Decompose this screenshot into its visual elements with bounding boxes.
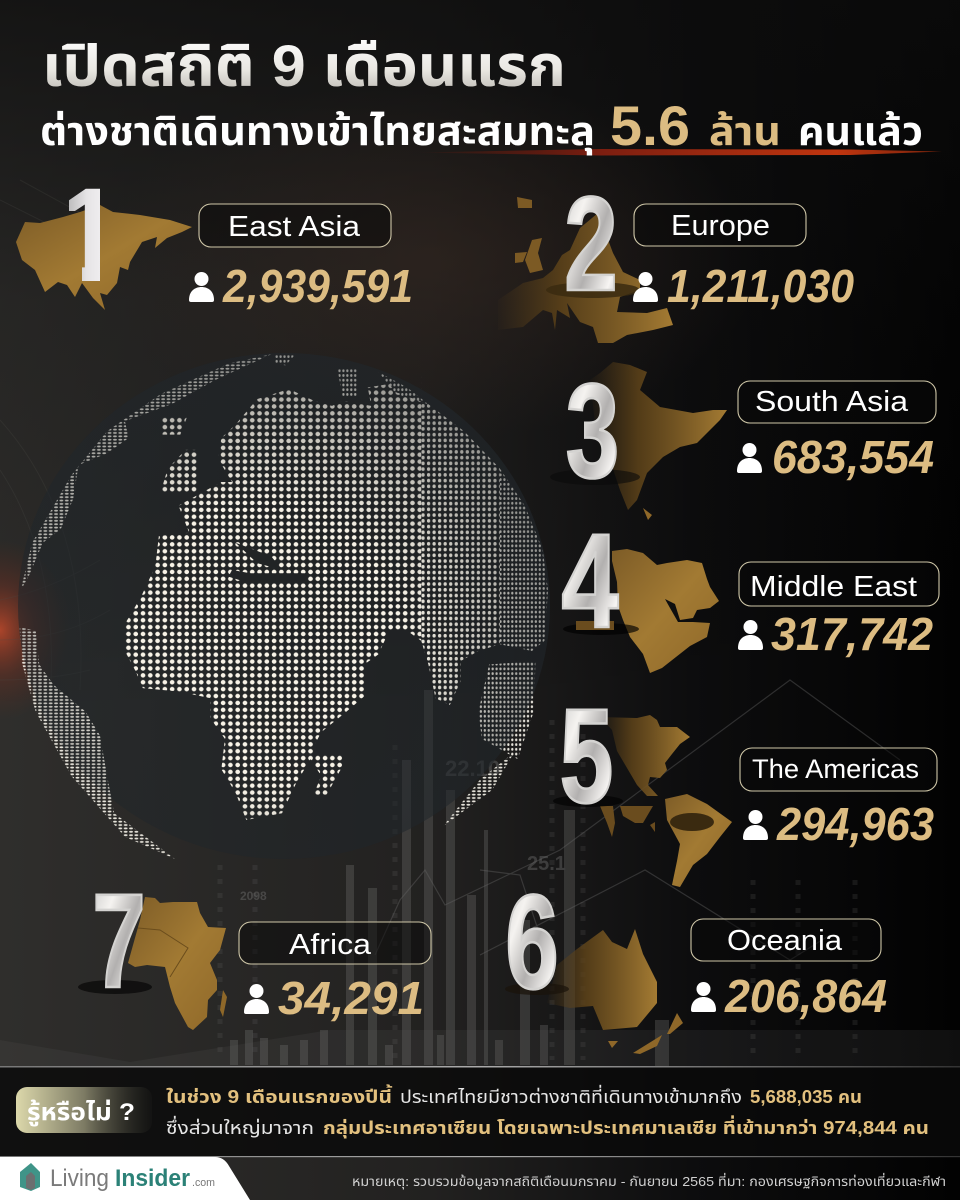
did you know text: 5,688,035 คน — [750, 1087, 862, 1107]
panel: The Americas: 294,963 — [776, 798, 934, 850]
logo panel: Insider — [115, 1165, 190, 1192]
panel: The Americas: 5 — [560, 680, 613, 831]
panel: East Asia: East Asia — [228, 211, 361, 243]
red underline — [415, 149, 942, 156]
did you know badge — [16, 1087, 152, 1133]
logo icon — [20, 1163, 40, 1191]
faint candlestick chart: 22.10 — [445, 756, 500, 781]
title: ล้าน — [709, 109, 781, 154]
title: ต่างชาติเดินทางเข้าไทยสะสมทะลุ — [40, 109, 595, 156]
faint candlestick chart: 2098 — [240, 889, 267, 903]
panel: Africa: Africa — [289, 929, 372, 961]
title — [40, 34, 942, 157]
logo panel: Living — [50, 1165, 109, 1192]
faint candlestick chart — [230, 690, 669, 1067]
did you know band — [0, 1066, 960, 1157]
logo panel: .com — [192, 1177, 215, 1189]
panel: Europe: 2 — [564, 168, 618, 319]
panel: South Asia: 683,554 — [772, 431, 934, 483]
did you know text: ซึ่งส่วนใหญ่มาจาก — [166, 1115, 314, 1138]
panel: Africa: 34,291 — [278, 972, 424, 1024]
panel: Middle East: 317,742 — [771, 608, 933, 660]
limb crescent bottom-right — [443, 752, 514, 827]
logo panel — [0, 1157, 250, 1200]
Iceland and UK dots — [161, 416, 198, 492]
panel: Africa: 7 — [92, 865, 146, 1016]
globe — [18, 353, 550, 859]
faint candlestick chart: 25.1 — [527, 853, 566, 875]
did you know text: ในช่วง 9 เดือนแรกของปีนี้ — [166, 1084, 393, 1107]
panel: East Asia — [16, 188, 411, 310]
footnote: หมายเหตุ: รวบรวมข้อมูลจากสถิติเดือนมกราคม - กันยายน 2565 ที่มา: กองเศรษฐกิจการท่องเที่ยวและกีฬา — [352, 1172, 946, 1189]
panel: Africa — [78, 865, 431, 1030]
limb crescent top-left — [21, 354, 271, 590]
title: 5.6 — [610, 94, 690, 157]
panel: Middle East: Middle East — [750, 571, 917, 603]
panel: Europe — [498, 168, 854, 343]
did you know text — [166, 1084, 929, 1139]
panel: South Asia: South Asia — [755, 386, 909, 418]
did you know text: ประเทศไทยมีชาวต่างชาติที่เดินทางเข้ามากถึง — [400, 1084, 742, 1107]
panel: South Asia — [550, 355, 936, 520]
panel: Europe: Europe — [671, 210, 770, 242]
panel: Middle East: 4 — [561, 507, 619, 656]
title: เปิดสถิติ 9 เดือนแรก — [42, 34, 566, 99]
title: คนแล้ว — [798, 109, 923, 154]
panel: Middle East — [561, 507, 939, 673]
panel: Europe: 1,211,030 — [667, 260, 854, 312]
panel: The Americas: The Americas — [752, 754, 919, 784]
panel: East Asia: 2,939,591 — [222, 260, 413, 312]
panel: Oceania: 6 — [505, 866, 559, 1017]
SE Asia dots — [478, 661, 536, 759]
panel: South Asia: 3 — [566, 355, 619, 506]
panel: Oceania: 206,864 — [724, 970, 887, 1022]
limb crescent bottom-left — [20, 627, 175, 859]
did you know text: กลุ่มประเทศอาเซียน โดยเฉพาะประเทศมาเลเซีย ที่เข้ามากว่า 974,844 คน — [323, 1115, 929, 1139]
panel: Oceania: Oceania — [727, 925, 843, 957]
Arctic Asia dots — [337, 369, 428, 404]
panel: Oceania — [505, 866, 887, 1054]
panel: The Americas — [553, 680, 937, 887]
did you know badge: รู้หรือไม่ ? — [27, 1098, 135, 1127]
panel: East Asia: 1 — [55, 160, 126, 310]
